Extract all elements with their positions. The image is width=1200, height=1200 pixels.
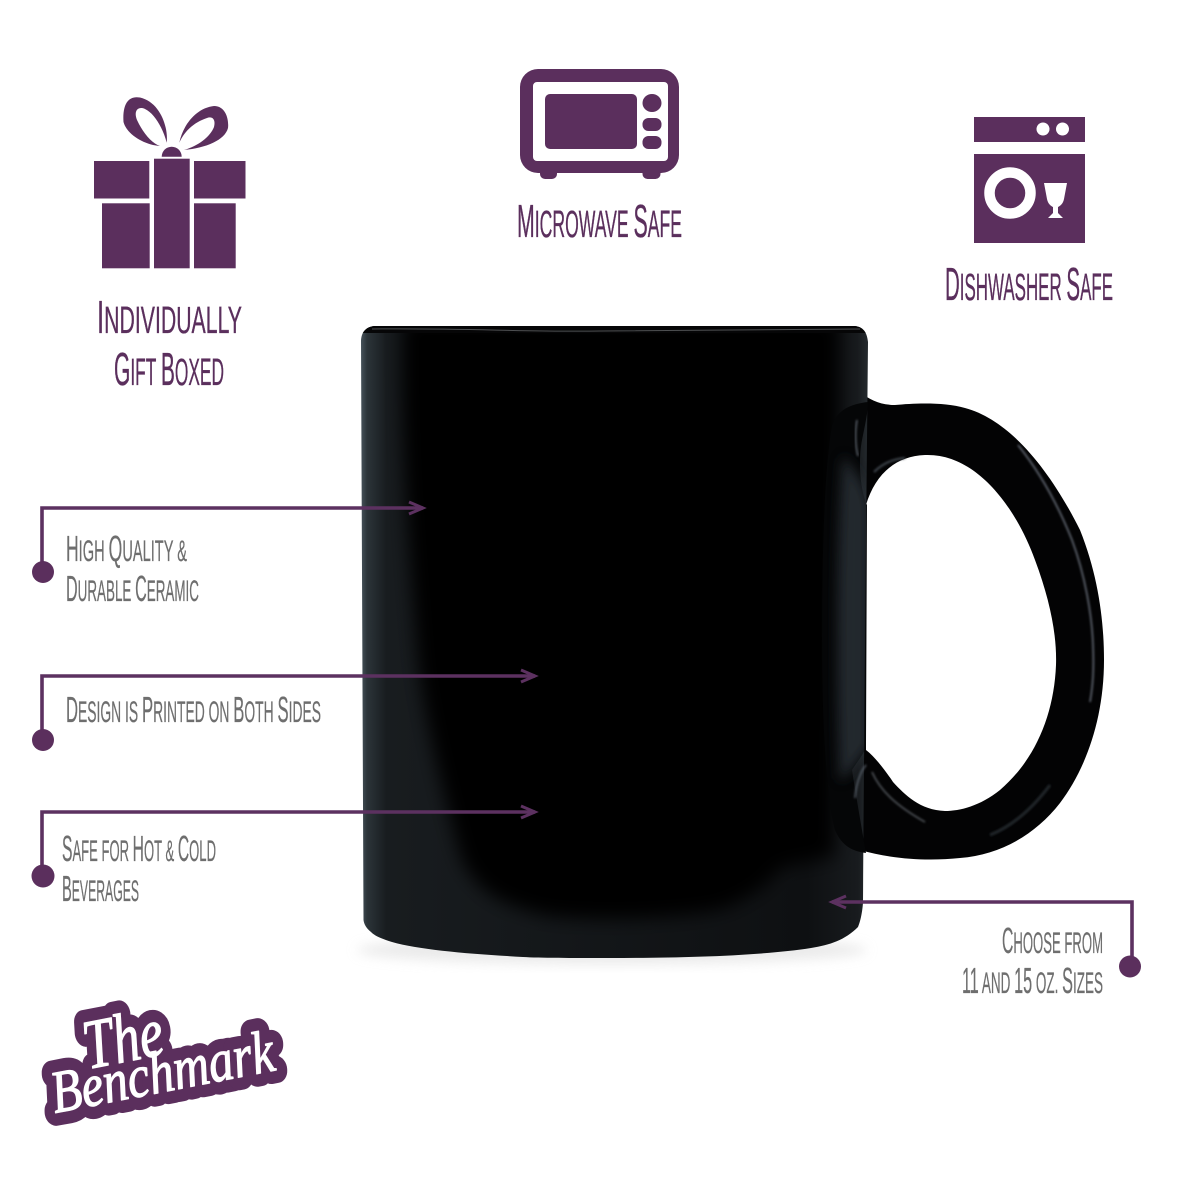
callout: high quality ceramic	[32, 502, 423, 609]
text: ceramic: DURABLE CERAMIC	[66, 568, 199, 609]
logo: the benchmark: Benchmark	[45, 1018, 280, 1126]
arrow: beverages	[32, 806, 535, 888]
logo: the benchmark: The	[76, 994, 170, 1085]
callout: sizes	[832, 896, 1141, 1001]
text: sizes: 11 AND 15 OZ. SIZES	[962, 960, 1103, 1001]
heading: individually gift boxed: GIFT BOXED	[114, 343, 224, 395]
arrow: ceramic	[32, 502, 423, 583]
arrow: print	[32, 670, 535, 751]
mug body	[361, 326, 868, 958]
text: ceramic: HIGH QUALITY &	[66, 528, 187, 569]
text: beverages	[62, 828, 216, 909]
heading: dishwasher safe: DISHWASHER SAFE	[945, 258, 1113, 310]
icon: gift box	[94, 97, 246, 268]
logo: the benchmark: The	[76, 994, 170, 1085]
mug rim	[372, 329, 860, 331]
mug handle joint	[822, 402, 868, 853]
heading: individually gift boxed: INDIVIDUALLY	[97, 291, 242, 343]
text: print: DESIGN IS PRINTED ON BOTH SIDES	[66, 689, 321, 730]
logo: the benchmark: Benchmark	[45, 1018, 280, 1126]
arrow: sizes	[832, 896, 1141, 978]
text: sizes	[962, 920, 1103, 1001]
icon: dishwasher	[974, 117, 1085, 243]
mug dark centre	[361, 318, 868, 919]
icon: microwave	[520, 69, 679, 179]
heading: microwave safe: MICROWAVE SAFE	[517, 195, 682, 247]
callout: printed both sides	[32, 670, 535, 751]
mug shadow	[357, 936, 867, 964]
mug	[357, 318, 1104, 964]
text: beverages: BEVERAGES	[62, 868, 139, 909]
callout: hot and cold	[32, 806, 535, 909]
heading: individually gift boxed	[97, 291, 242, 395]
text: ceramic	[66, 528, 199, 609]
text: beverages: SAFE FOR HOT & COLD	[62, 828, 216, 869]
mug handle	[860, 392, 1104, 859]
